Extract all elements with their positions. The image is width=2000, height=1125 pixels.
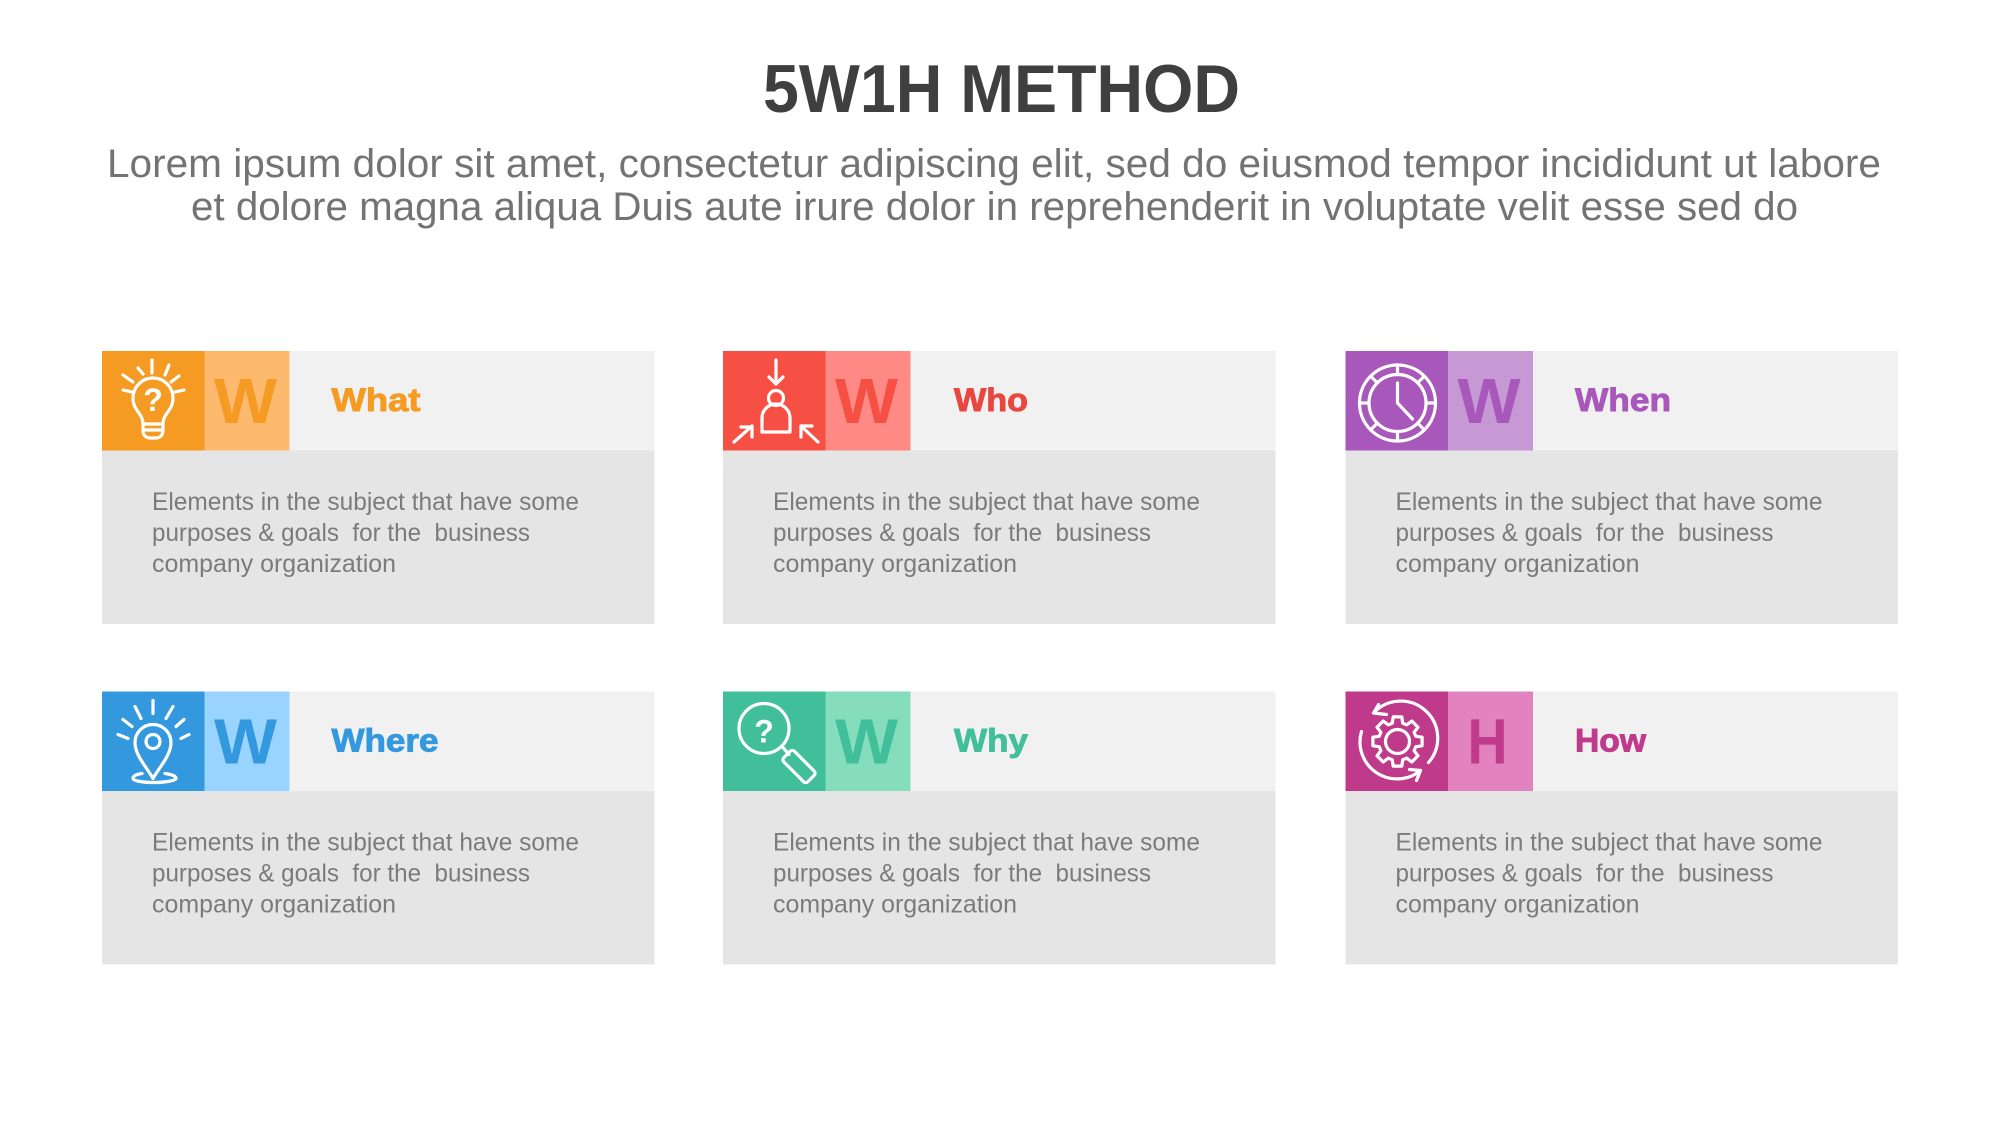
heading: How: How <box>1575 722 1646 758</box>
description text <box>152 488 579 578</box>
panel: What <box>102 351 654 624</box>
icon: magnifier with question mark: ? <box>754 714 774 750</box>
letter W: W <box>1458 365 1521 437</box>
description text: purposes & goals for the business <box>773 860 1151 888</box>
description text <box>1396 828 1822 918</box>
description text: company organization <box>152 550 396 578</box>
letter W: W <box>214 706 278 778</box>
description text: company organization <box>773 890 1017 918</box>
icon: light bulb with question mark: ? <box>143 382 163 418</box>
heading: What: What <box>332 382 421 418</box>
description text: Elements in the subject that have some <box>773 828 1200 856</box>
description text: purposes & goals for the business <box>152 519 530 547</box>
description text: Elements in the subject that have some <box>152 828 579 856</box>
subtitle: Lorem ipsum dolor sit amet, consectetur adipiscing elit, sed do eiusmod tempor incididunt ut labore <box>107 142 1881 186</box>
description text: Elements in the subject that have some <box>1396 828 1822 856</box>
description text: Elements in the subject that have some <box>152 488 579 516</box>
panel: How <box>1346 692 1898 964</box>
icon: person with incoming arrows <box>734 360 818 442</box>
letter W: W <box>835 365 899 437</box>
letter H: H <box>1468 706 1508 778</box>
panel: When <box>1346 351 1898 624</box>
description text: company organization <box>1396 890 1640 918</box>
heading: Why: Why <box>954 722 1028 758</box>
description text: company organization <box>773 550 1017 578</box>
icon: clock <box>1360 365 1436 441</box>
icon: gear with cycle arrows <box>1360 701 1438 780</box>
description text: purposes & goals for the business <box>152 860 530 888</box>
subtitle: et dolore magna aliqua Duis aute irure dolor in reprehenderit in voluptate velit esse sed do <box>191 185 1798 229</box>
description text: company organization <box>1396 550 1640 578</box>
subtitle <box>107 142 1881 229</box>
description text: Elements in the subject that have some <box>1396 488 1822 516</box>
letter W: W <box>835 706 899 778</box>
icon: location pin <box>118 700 189 782</box>
description text <box>1396 488 1822 578</box>
description text: purposes & goals for the business <box>773 519 1151 547</box>
panel: Who <box>723 351 1276 624</box>
title: 5W1H METHOD <box>763 51 1240 127</box>
description text: purposes & goals for the business <box>1396 519 1774 547</box>
description text: company organization <box>152 890 396 918</box>
heading: Who: Who <box>954 382 1028 418</box>
description text <box>152 828 579 918</box>
icon: light bulb with question mark <box>123 360 184 438</box>
description text <box>773 828 1200 918</box>
icon: magnifier with question mark <box>739 704 816 784</box>
heading: Where: Where <box>332 722 438 758</box>
description text: Elements in the subject that have some <box>773 488 1200 516</box>
description text <box>773 488 1200 578</box>
description text: purposes & goals for the business <box>1396 860 1774 888</box>
heading: When: When <box>1575 382 1671 418</box>
panel: Where <box>102 692 654 964</box>
panel: Why <box>723 692 1276 964</box>
letter W: W <box>214 365 278 437</box>
